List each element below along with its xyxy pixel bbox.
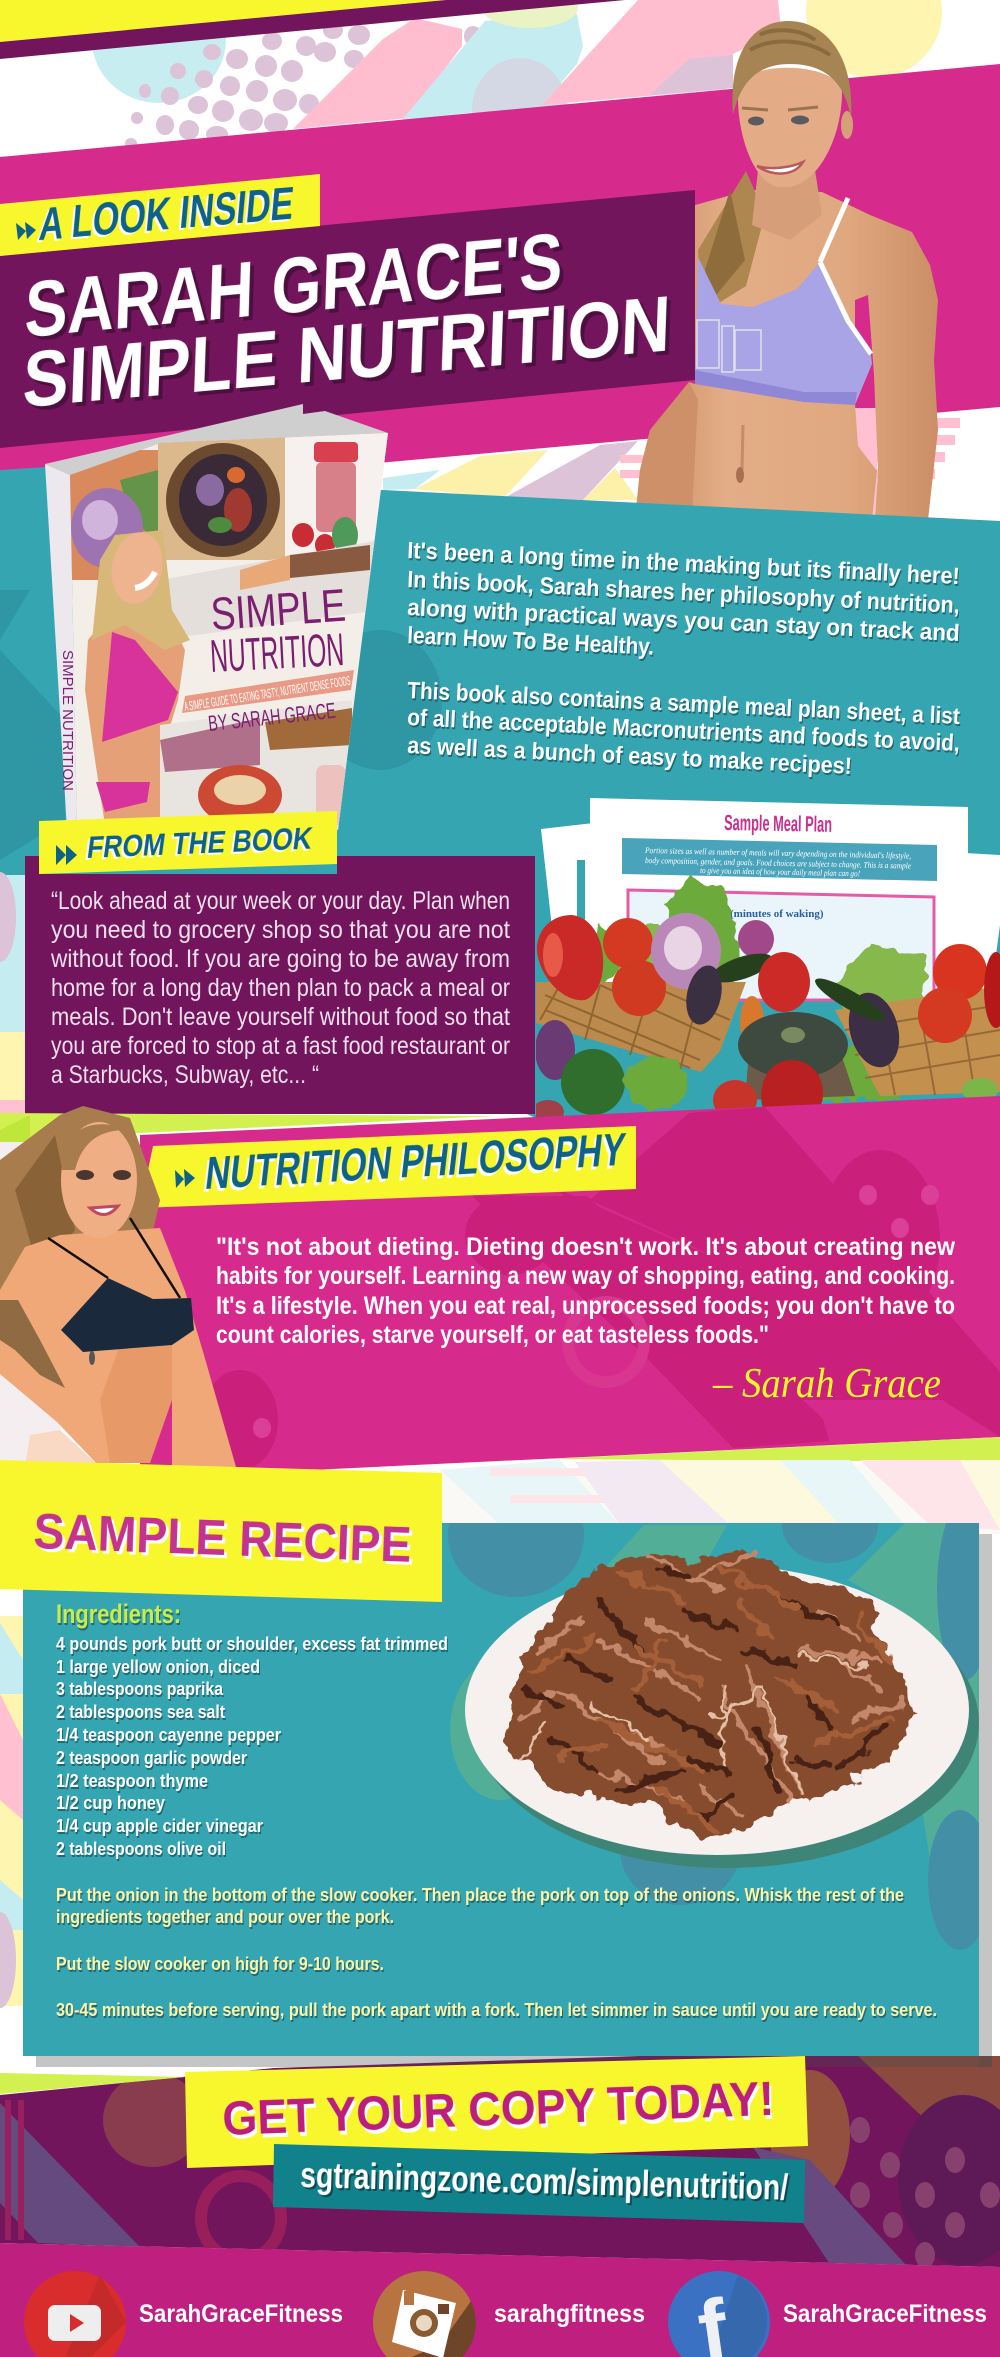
photo: Sarah Grace in black top [0, 1106, 236, 1467]
ingredients list: 1/2 teaspoon thyme [56, 1770, 208, 1791]
lime bands [0, 1113, 497, 1178]
quote text: home for a long day then plan to pack a meal or [51, 974, 510, 1002]
heading: sample recipe: SAMPLE RECIPE [33, 1503, 412, 1573]
panel: title banner [0, 190, 695, 448]
panel: recipe shadow [36, 1534, 992, 2067]
meal plan note [644, 845, 911, 878]
top pastel pattern [92, 0, 942, 162]
yellow heading tag [0, 1460, 442, 1602]
panel: book quote [25, 856, 535, 1114]
icon: chevrons [56, 845, 77, 865]
top yellow band [0, 0, 446, 42]
footer band [0, 2243, 1000, 2357]
meal plan note: Portion sizes as well as number of meals will vary depending on the individual's lifestyle, [644, 845, 911, 861]
book author: BY SARAH GRACE [207, 698, 337, 736]
tag: a look inside [0, 174, 320, 256]
call to action banner [185, 2056, 808, 2168]
meal plan detail: (minutes of waking) [730, 908, 824, 920]
ingredients list: 1 large yellow onion, diced [56, 1656, 260, 1677]
icon: youtube [24, 2271, 126, 2357]
teal background panels [0, 462, 1000, 1120]
meal plan note: to give you an idea of how your daily meal plan can go! [700, 865, 860, 878]
recipe instructions: ingredients together and pour over the pork. [56, 1906, 394, 1927]
pastel shapes under header band [383, 418, 960, 515]
ingredients list: 2 teaspoon garlic powder [56, 1747, 247, 1768]
recipe instructions [56, 1884, 937, 2020]
book: Simple Nutrition: NUTRITION [209, 623, 345, 682]
meal plan note: body composition, gender, and goals. Food choices are subject to change. This is a sample [645, 855, 911, 871]
icon: chevrons [175, 1169, 195, 1188]
photo: Sarah Grace in purple top [636, 21, 938, 520]
heading: get your copy today: GET YOUR COPY TODAY! [221, 2073, 775, 2146]
book: Simple Nutrition [45, 404, 388, 830]
ingredients list: 2 tablespoons sea salt [56, 1701, 225, 1722]
tag: nutrition philosophy: NUTRITION PHILOSOPHY [203, 1123, 628, 1199]
recipe instructions: Put the onion in the bottom of the slow cooker. Then place the pork on top of the onions. Whisk the rest of the [56, 1884, 904, 1905]
photo: vegetable baskets [532, 875, 1000, 1124]
intro text: It's been a long time in the making but its finally here! [407, 537, 960, 589]
url banner: sgtrainingzone.com/simplenutrition/ [300, 2154, 789, 2208]
intro text: In this book, Sarah shares her philosophy of nutrition, [407, 566, 960, 618]
quote text: you need to grocery shop so that you are not [51, 916, 510, 944]
meal plan heading: Sample Meal Plan [724, 810, 832, 837]
label: instagram: sarahgfitness [494, 2300, 645, 2328]
book: Simple Nutrition: A SIMPLE GUIDE TO EATING TASTY, NUTRIENT DENSE FOODS [183, 673, 352, 714]
label: youtube: SarahGraceFitness [139, 2300, 343, 2328]
quote text: a Starbucks, Subway, etc... “ [51, 1061, 319, 1089]
philosophy quote: count calories, starve yourself, or eat tasteless foods." [216, 1321, 769, 1349]
ingredients list: 2 tablespoons olive oil [56, 1838, 226, 1859]
icon: chevrons [16, 222, 36, 240]
quote text: meals. Don't leave yourself without food so that [51, 1003, 510, 1031]
signature: – Sarah Grace [712, 1361, 941, 1407]
ingredients heading: Ingredients: [56, 1599, 181, 1629]
intro text [407, 537, 961, 779]
quote text: without food. If you are going to be away from [50, 945, 510, 973]
panel: sample recipe [0, 1460, 993, 2056]
intro text: along with practical ways you can stay on track and [407, 594, 960, 646]
philosophy quote: "It's not about dieting. Dieting doesn't work. It's about creating new [216, 1233, 955, 1261]
ingredients list: 3 tablespoons paprika [56, 1678, 224, 1699]
ingredients list: 4 pounds pork butt or shoulder, excess fat trimmed [56, 1633, 448, 1654]
ingredients list: 1/2 cup honey [56, 1792, 166, 1813]
tag: from the book [39, 811, 337, 874]
philosophy quote [216, 1233, 955, 1349]
tag: a look inside: A LOOK INSIDE [37, 177, 296, 250]
heading: Sarah Grace's: SARAH GRACE'S [23, 216, 564, 354]
icon: facebook [668, 2271, 770, 2357]
tag: nutrition philosophy [140, 1123, 636, 1208]
book title: SIMPLE [209, 579, 347, 640]
left pastel strip [0, 872, 25, 1116]
book spine text: SIMPLE NUTRITION [59, 650, 76, 791]
ingredients list: 1/4 teaspoon cayenne pepper [56, 1724, 281, 1745]
intro text: learn How To Be Healthy. [407, 622, 655, 660]
quote text: you are forced to stop at a fast food restaurant or [51, 1032, 510, 1060]
intro text: as well as a bunch of easy to make recipes! [407, 732, 852, 779]
panel: left recipe pastel strip [0, 1616, 23, 2008]
meal plan sheets [541, 798, 1000, 1000]
lime band bottom [0, 2073, 185, 2094]
url banner [273, 2144, 805, 2223]
lime strip and pastel stripes [340, 1437, 1000, 1534]
bottom purple section [0, 2056, 1000, 2268]
quote text: “Look ahead at your week or your day. Plan when [51, 887, 510, 915]
icon: instagram [373, 2271, 476, 2357]
heading: Simple Nutrition: SIMPLE NUTRITION [21, 279, 672, 424]
quote text [50, 887, 510, 1089]
photo: pulled pork plate [465, 1546, 979, 1868]
tag: from the book: FROM THE BOOK [85, 821, 315, 865]
header magenta band [0, 64, 1000, 495]
ingredients list [56, 1633, 448, 1859]
ingredients list: 1/4 cup apple cider vinegar [56, 1815, 263, 1836]
panel: philosophy band [0, 1096, 1000, 1472]
top purple band [0, 0, 625, 59]
recipe instructions: Put the slow cooker on high for 9-10 hours. [56, 1953, 384, 1974]
